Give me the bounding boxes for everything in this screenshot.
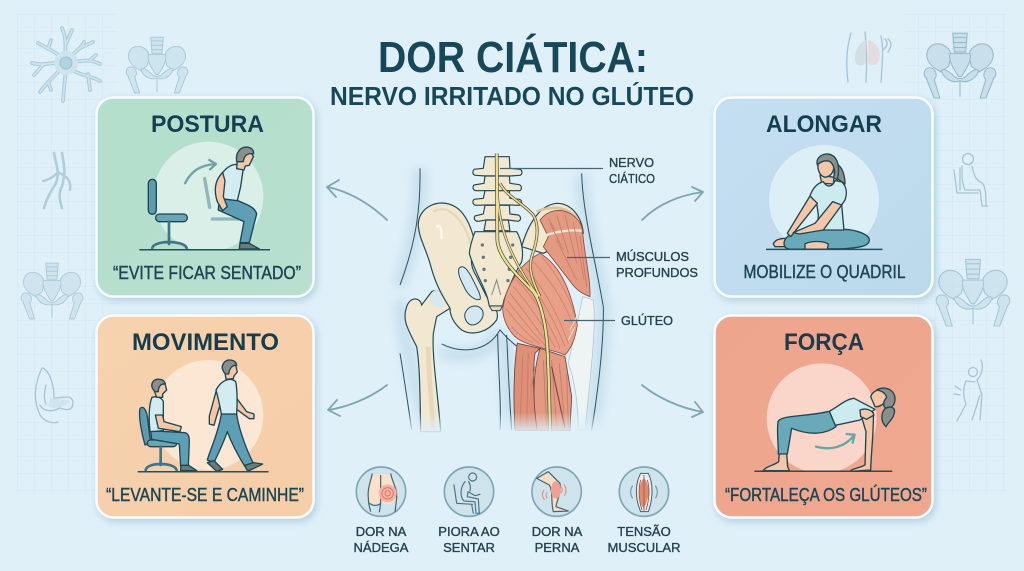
- white tendon: [568, 297, 594, 430]
- illustration: sitting and walking: [140, 360, 263, 471]
- icon: stretching figure: [954, 360, 982, 421]
- heading: alongar: ALONGAR: [766, 111, 882, 138]
- icon: pelvis top right: [924, 33, 996, 98]
- symptom label: dor na nadega: DOR NA: [356, 524, 407, 539]
- icon: neuron: [32, 28, 100, 101]
- symptom label: piora ao sentar: [438, 524, 500, 555]
- label: nervo ciatico: CIÁTICO: [609, 171, 655, 186]
- label: gluteo: [564, 313, 673, 328]
- label: nervo ciatico: [500, 155, 655, 186]
- symptom label: piora ao sentar: PIORA AO: [438, 524, 500, 539]
- label: musculos profundos: PROFUNDOS: [616, 265, 698, 280]
- title: DOR CIÁTICA:: [378, 32, 648, 82]
- illustration: glute bridge: [763, 363, 895, 473]
- arrow: to postura: [327, 180, 387, 220]
- panel: postura: [96, 98, 314, 296]
- symptom label: dor na nadega: [354, 524, 409, 555]
- lumbar vertebrae: [473, 157, 522, 231]
- ground line: [754, 470, 892, 472]
- icon: pelvis right: [936, 259, 1010, 326]
- symptom label: dor na perna: PERNA: [535, 540, 580, 555]
- ground line: [766, 248, 882, 250]
- symptom label: dor na nadega: NÁDEGA: [354, 540, 409, 555]
- icon: glutes top right: [847, 32, 891, 82]
- ground line: [138, 471, 268, 473]
- panel: forca: [714, 316, 932, 518]
- gluteus maximus: [503, 253, 577, 355]
- subtitle: NERVO IRRITADO NO GLÚTEO: [330, 81, 694, 111]
- icon: pelvis left: [21, 263, 83, 319]
- symptom icons: [356, 467, 669, 516]
- label: musculos profundos: [567, 249, 698, 280]
- symptom label: tensao muscular: [608, 524, 680, 555]
- gluteus medius: [540, 210, 590, 297]
- panel: alongar: [714, 98, 932, 296]
- caption: postura: “EVITE FICAR SENTADO”: [113, 263, 301, 283]
- icon: hip side view: [35, 368, 73, 423]
- icon: pelvis top left: [126, 37, 188, 93]
- symptom label: piora ao sentar: SENTAR: [443, 540, 495, 555]
- symptom label: tensao muscular: MUSCULAR: [608, 540, 680, 555]
- caption: alongar: MOBILIZE O QUADRIL: [744, 262, 906, 282]
- caption: forca: “FORTALEÇA OS GLÚTEOS”: [725, 484, 927, 505]
- title: [330, 32, 694, 111]
- label: nervo ciatico: NERVO: [609, 155, 654, 170]
- sciatic nerve: [497, 153, 550, 432]
- heading: movimento: MOVIMENTO: [132, 329, 279, 356]
- label: musculos profundos: MÚSCULOS: [616, 249, 689, 264]
- left femur: [405, 291, 450, 432]
- illustration: seated hip stretch: [769, 145, 879, 255]
- label: gluteo: GLÚTEO: [621, 313, 673, 328]
- arrow: to alongar: [642, 187, 703, 220]
- symptom label: tensao muscular: TENSÃO: [617, 524, 671, 539]
- obturator foramen: [459, 267, 480, 300]
- heading: postura: POSTURA: [151, 111, 264, 138]
- icon: seated person: [954, 154, 988, 206]
- illustration: man rising from chair: [148, 142, 263, 252]
- arrow: to forca: [642, 385, 703, 417]
- icon: sitting: [444, 467, 494, 516]
- icon: muscle tension: [619, 467, 669, 516]
- arrow: to movimento: [328, 385, 387, 416]
- central anatomy illustration: [395, 153, 620, 442]
- symptom label: dor na perna: [532, 524, 583, 555]
- left ilium and ischium: [418, 203, 497, 333]
- right ilium: [522, 203, 583, 253]
- sacrum: [469, 232, 523, 306]
- hamstrings: [514, 343, 540, 431]
- symptom label: dor na perna: DOR NA: [532, 524, 583, 539]
- panel: movimento: [96, 316, 314, 518]
- heading: forca: FORÇA: [784, 329, 864, 356]
- caption: movimento: “LEVANTE-SE E CAMINHE”: [106, 485, 304, 505]
- icon: leg pain: [532, 467, 581, 516]
- icon: buttock pain: [356, 467, 406, 516]
- ground line: [139, 249, 270, 251]
- icon: sciatic nerve tree: [43, 153, 70, 208]
